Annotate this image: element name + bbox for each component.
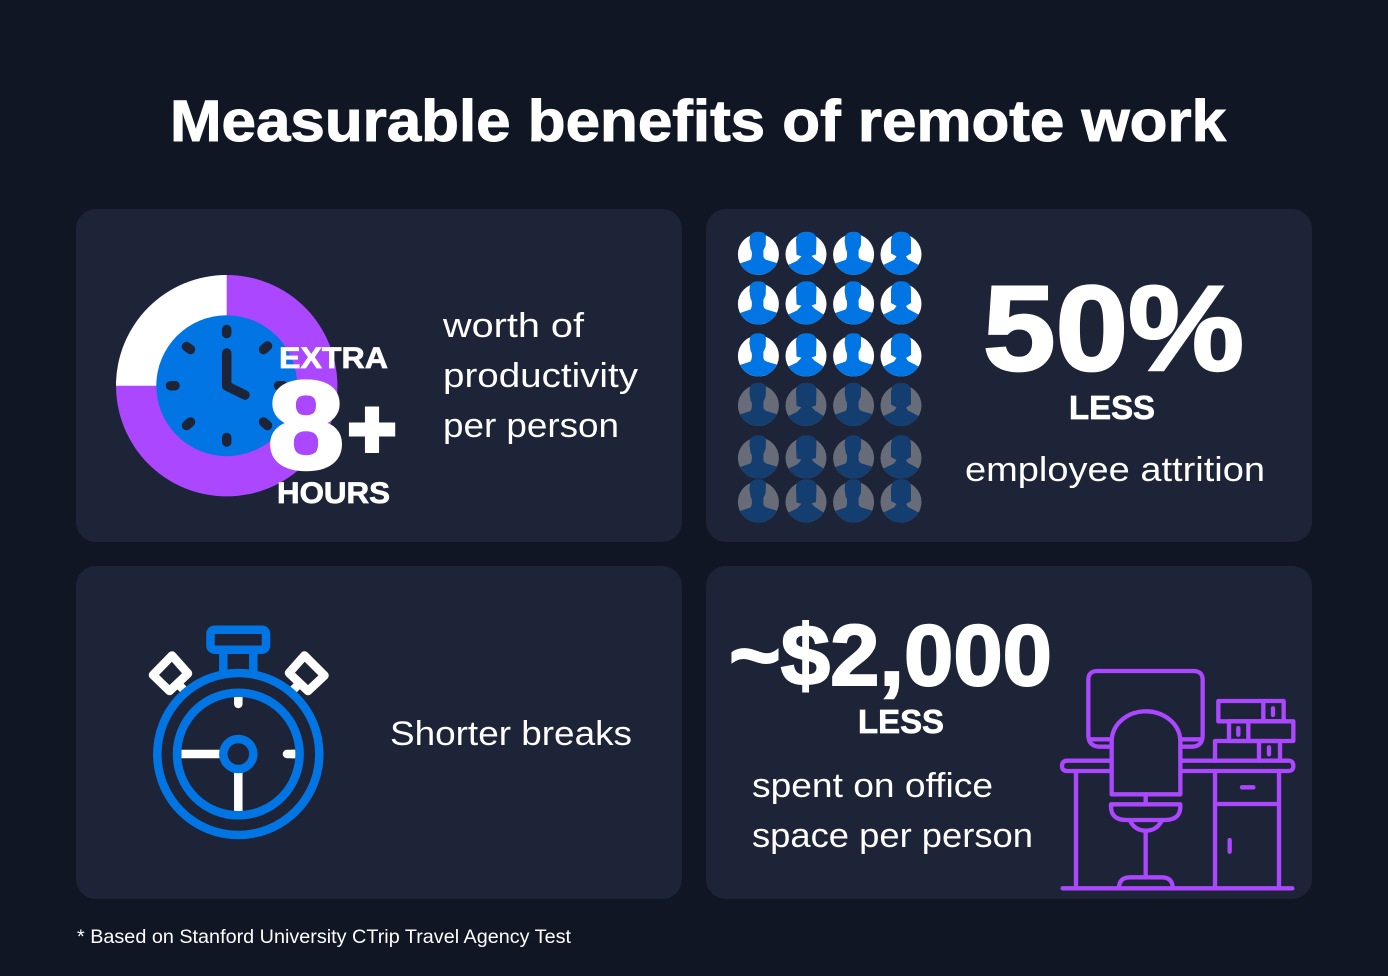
text: worth of productivity per person: worth of [442,307,585,345]
panel: extra hours [76,209,682,542]
stat: extra 8+ hours: EXTRA [279,342,388,375]
stat: extra 8+ hours [268,342,396,510]
stat: 50% less: 50% [983,260,1244,396]
icon: stopwatch [153,630,324,835]
text: employee attrition: employee attrition [965,451,1265,489]
stat: 50% less: LESS [1069,389,1155,426]
stat: extra 8+ hours: + [348,384,396,475]
text: worth of productivity per person: productivity [443,357,638,395]
icon: desk and chair [1062,671,1293,888]
icon: people grid, lost [738,383,922,522]
stat: extra 8+ hours: 8 [268,357,344,495]
footnote: * Based on Stanford University CTrip Travel Agency Test [77,926,572,948]
stat: ~$2,000 less: LESS [858,703,944,740]
panel: employee attrition [706,209,1312,542]
text: spent on office space per person: space per person [752,817,1033,855]
stat: extra 8+ hours: HOURS [277,477,390,510]
text: spent on office space per person [752,767,1033,855]
panel: shorter breaks [76,566,682,899]
text: spent on office space per person: spent on office [752,767,993,805]
panel: office cost [706,566,1312,899]
text: worth of productivity per person [442,307,638,445]
stat: ~$2,000 less: ~$2,000 [729,608,1052,704]
text: worth of productivity per person: per person [443,407,619,445]
title: Measurable benefits of remote work [170,89,1227,154]
icon: clock donut [116,275,337,496]
text: shorter breaks: Shorter breaks [390,715,632,753]
icon: people grid, retained [738,232,922,376]
